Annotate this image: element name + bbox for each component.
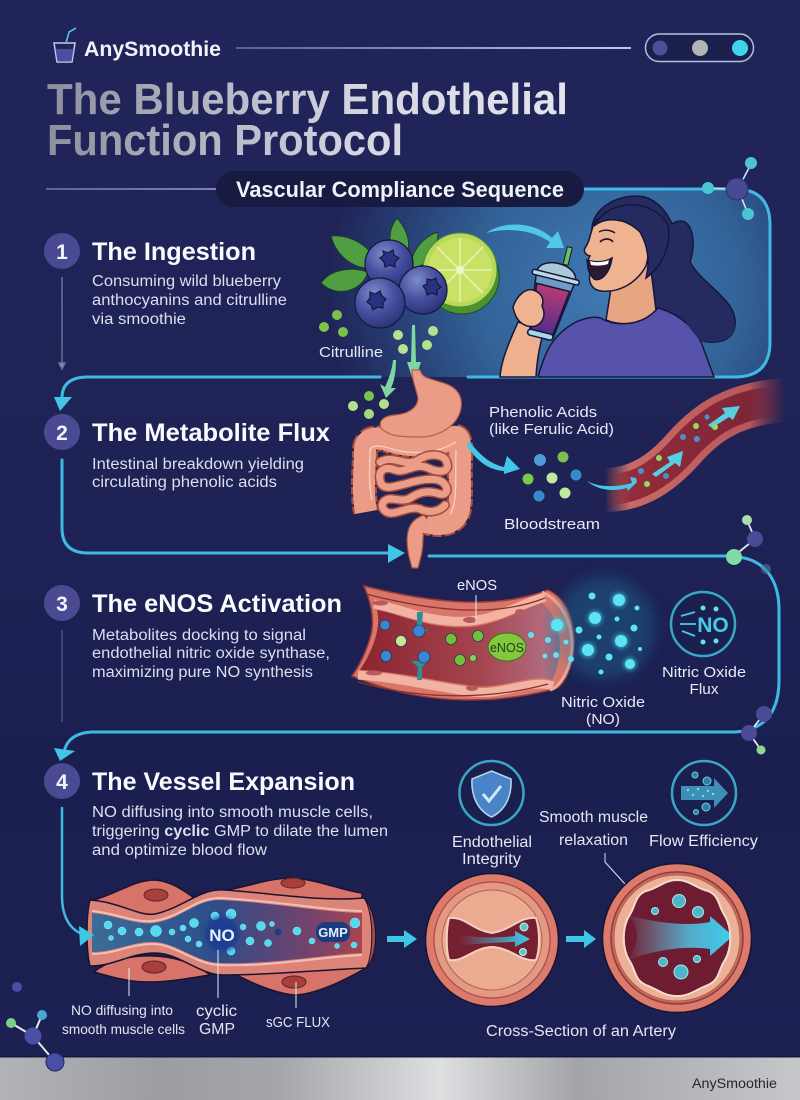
description: circulating phenolic acids bbox=[92, 474, 277, 491]
arrow: intestine to acids bbox=[467, 441, 520, 474]
bloodstream label: Bloodstream bbox=[504, 516, 600, 533]
description: NO diffusing into smooth muscle cells, bbox=[92, 804, 373, 821]
label: cyclic GMP: GMP bbox=[199, 1021, 235, 1038]
eNOS label: eNOS bbox=[457, 577, 497, 594]
GMP label in vessel bbox=[316, 922, 350, 942]
step 3 bbox=[44, 585, 342, 681]
gray step lines bbox=[59, 277, 65, 722]
nitric oxide label: Nitric Oxide bbox=[561, 694, 645, 711]
flow connector lines bbox=[54, 189, 779, 936]
smoothie cup bbox=[517, 240, 587, 344]
small intestine bbox=[380, 455, 447, 513]
NO label in vessel: NO bbox=[209, 926, 235, 945]
arrow: narrow to dilated bbox=[566, 930, 596, 948]
description: and optimize blood flow bbox=[92, 842, 268, 859]
vessel wall bbox=[352, 586, 574, 700]
glowing particles bbox=[104, 909, 360, 955]
description bbox=[92, 456, 304, 491]
receptors bbox=[411, 612, 428, 680]
hair back bbox=[592, 196, 735, 342]
description: Metabolites docking to signal bbox=[92, 627, 306, 644]
icon: endothelial integrity shield bbox=[460, 761, 524, 825]
heading: The eNOS Activation bbox=[92, 590, 342, 618]
step 1 bbox=[44, 233, 287, 328]
nitric oxide flux label bbox=[662, 664, 746, 698]
subtitle rule bbox=[46, 188, 216, 190]
nitric oxide flux label: Nitric Oxide bbox=[662, 664, 746, 681]
description: triggering cyclic GMP to dilate the lumen bbox=[92, 823, 388, 840]
description bbox=[92, 804, 388, 859]
description bbox=[92, 273, 287, 328]
phenolic acid particles bbox=[522, 452, 582, 502]
ponytail over shoulder bbox=[676, 296, 735, 342]
icon: nitric oxide flux: NO bbox=[697, 614, 729, 637]
label: endothelial integrity: Integrity bbox=[462, 851, 521, 868]
callout labels bbox=[62, 1002, 330, 1038]
title: Function Protocol bbox=[47, 116, 403, 165]
number badge 2: 2 bbox=[56, 422, 68, 445]
label: cyclic GMP bbox=[196, 1003, 237, 1038]
NO label in vessel bbox=[205, 917, 239, 951]
inner lining bbox=[92, 898, 362, 965]
arrow: smoothie to mouth bbox=[486, 224, 564, 248]
callout lines bbox=[129, 853, 625, 1008]
vessel end bbox=[364, 898, 376, 968]
label: endothelial integrity bbox=[452, 834, 532, 868]
illustration: blueberries and lime bbox=[321, 218, 499, 328]
illustration: digestive system bbox=[364, 370, 461, 568]
phenolic acids label bbox=[489, 404, 614, 438]
hand bbox=[513, 290, 544, 326]
wordmark: AnySmoothie bbox=[84, 38, 221, 61]
nitric oxide particles bbox=[528, 576, 655, 680]
nitric oxide flux label: Flux bbox=[690, 681, 719, 698]
lumen bbox=[92, 900, 362, 963]
mouth bbox=[587, 258, 612, 280]
panel: ingestion glow background bbox=[320, 189, 770, 377]
bubbles bbox=[652, 894, 704, 979]
large intestine bbox=[364, 437, 460, 524]
nitric oxide label bbox=[561, 694, 645, 728]
eyebrow bbox=[599, 230, 615, 233]
description: endothelial nitric oxide synthase, bbox=[92, 645, 330, 662]
description: Intestinal breakdown yielding bbox=[92, 456, 304, 473]
step 4 bbox=[44, 763, 388, 859]
subtitle pill: Vascular Compliance Sequence bbox=[236, 177, 564, 202]
footer bbox=[0, 1056, 800, 1100]
muscle nuclei bbox=[142, 878, 306, 988]
citrulline particles bbox=[319, 310, 438, 354]
citrulline label: Citrulline bbox=[319, 345, 383, 361]
wall lining lines bbox=[358, 594, 548, 696]
logo bbox=[54, 28, 221, 62]
number badge 4 bbox=[44, 763, 80, 799]
number badge 4: 4 bbox=[56, 771, 68, 794]
heading: The Metabolite Flux bbox=[92, 419, 330, 447]
eye bbox=[600, 239, 613, 242]
illustration: woman drinking smoothie bbox=[500, 196, 735, 377]
title: The Blueberry Endothelial bbox=[47, 75, 568, 124]
illustration: narrow artery cross-section bbox=[426, 874, 558, 1006]
shirt bbox=[538, 308, 714, 377]
step 2 bbox=[44, 414, 330, 491]
description: Consuming wild blueberry bbox=[92, 273, 281, 290]
arrow: citrulline to stomach bbox=[380, 325, 421, 398]
label: sGC FLUX: sGC FLUX bbox=[266, 1014, 330, 1031]
flow arrows bbox=[652, 406, 740, 477]
number badge 3: 3 bbox=[56, 593, 68, 616]
eNOS enzyme badge bbox=[488, 633, 526, 661]
dilated lumen bbox=[624, 881, 730, 995]
title bbox=[47, 75, 568, 165]
arrow: vessel to cross-section bbox=[387, 930, 417, 948]
vessel cells bbox=[366, 600, 525, 691]
vessel end ring bbox=[542, 592, 572, 690]
face bbox=[584, 217, 652, 291]
neck bbox=[606, 262, 656, 324]
footer: AnySmoothie bbox=[692, 1076, 777, 1091]
description bbox=[92, 627, 330, 681]
metabolite particles bbox=[380, 620, 484, 666]
illustration: blood vessel with particles bbox=[605, 400, 785, 490]
eNOS enzyme badge: eNOS bbox=[490, 641, 524, 655]
molecule lower right bbox=[741, 706, 772, 754]
number badge 2 bbox=[44, 414, 80, 450]
label: NO diffusing: NO diffusing into bbox=[71, 1002, 173, 1018]
GMP label in vessel: GMP bbox=[318, 925, 348, 940]
label: cyclic GMP: cyclic bbox=[196, 1003, 237, 1020]
phenolic acids label: Phenolic Acids bbox=[489, 404, 597, 421]
flow arrow bbox=[458, 931, 530, 947]
arm bbox=[500, 322, 544, 377]
muscle cells bbox=[94, 878, 366, 995]
description: via smoothie bbox=[92, 311, 186, 328]
heading: The Ingestion bbox=[92, 238, 256, 266]
number badge 1: 1 bbox=[56, 241, 68, 264]
description: anthocyanins and citrulline bbox=[92, 292, 287, 309]
molecule middle right bbox=[726, 515, 771, 574]
particles bbox=[638, 468, 644, 474]
vessel wall bbox=[87, 890, 376, 975]
label: smooth muscle relaxation bbox=[539, 809, 648, 849]
large flow arrow bbox=[628, 915, 733, 960]
blueberries bbox=[355, 240, 447, 328]
progress indicator pill bbox=[646, 34, 754, 62]
icon: smoothie cup bbox=[54, 28, 76, 62]
illustration: eNOS vessel bbox=[352, 577, 574, 700]
illustration: dilated artery cross-section bbox=[602, 864, 752, 1012]
label: NO diffusing: smooth muscle cells bbox=[62, 1021, 185, 1037]
number badge 1 bbox=[44, 233, 80, 269]
nitric oxide label: (NO) bbox=[586, 711, 620, 728]
icon: flow efficiency bbox=[672, 761, 736, 825]
stomach bbox=[380, 370, 461, 437]
label: smooth muscle relaxation: Smooth muscle bbox=[539, 809, 648, 826]
right side labels bbox=[452, 809, 758, 1040]
leaves bbox=[321, 218, 438, 291]
number badge 3 bbox=[44, 585, 80, 621]
particles near stomach bbox=[348, 391, 389, 419]
label: cross-section: Cross-Section of an Artery bbox=[486, 1023, 676, 1040]
front hair bbox=[594, 205, 669, 278]
eNOS label bbox=[457, 577, 497, 622]
header divider bbox=[236, 47, 631, 49]
label: endothelial integrity: Endothelial bbox=[452, 834, 532, 851]
arrow: acids to bloodstream bbox=[587, 477, 637, 491]
heading: The Vessel Expansion bbox=[92, 768, 355, 796]
inner lining bbox=[358, 597, 553, 693]
label: smooth muscle relaxation: relaxation bbox=[559, 832, 628, 849]
lime bbox=[423, 233, 499, 314]
description: maximizing pure NO synthesis bbox=[92, 664, 313, 681]
narrowed lumen bbox=[447, 918, 539, 960]
label: NO diffusing bbox=[62, 1002, 185, 1037]
label: flow efficiency: Flow Efficiency bbox=[649, 833, 758, 850]
icon: nitric oxide flux bbox=[671, 592, 735, 656]
subtitle pill bbox=[216, 171, 584, 207]
rectum bbox=[407, 515, 432, 568]
lumen bbox=[360, 603, 560, 687]
phenolic acids label: (like Ferulic Acid) bbox=[489, 421, 614, 438]
molecule top right bbox=[702, 157, 757, 220]
molecule bottom left bbox=[6, 982, 64, 1071]
illustration: dilating vessel bbox=[87, 878, 376, 995]
arrow: step 4 flow into vessel bbox=[79, 926, 94, 946]
